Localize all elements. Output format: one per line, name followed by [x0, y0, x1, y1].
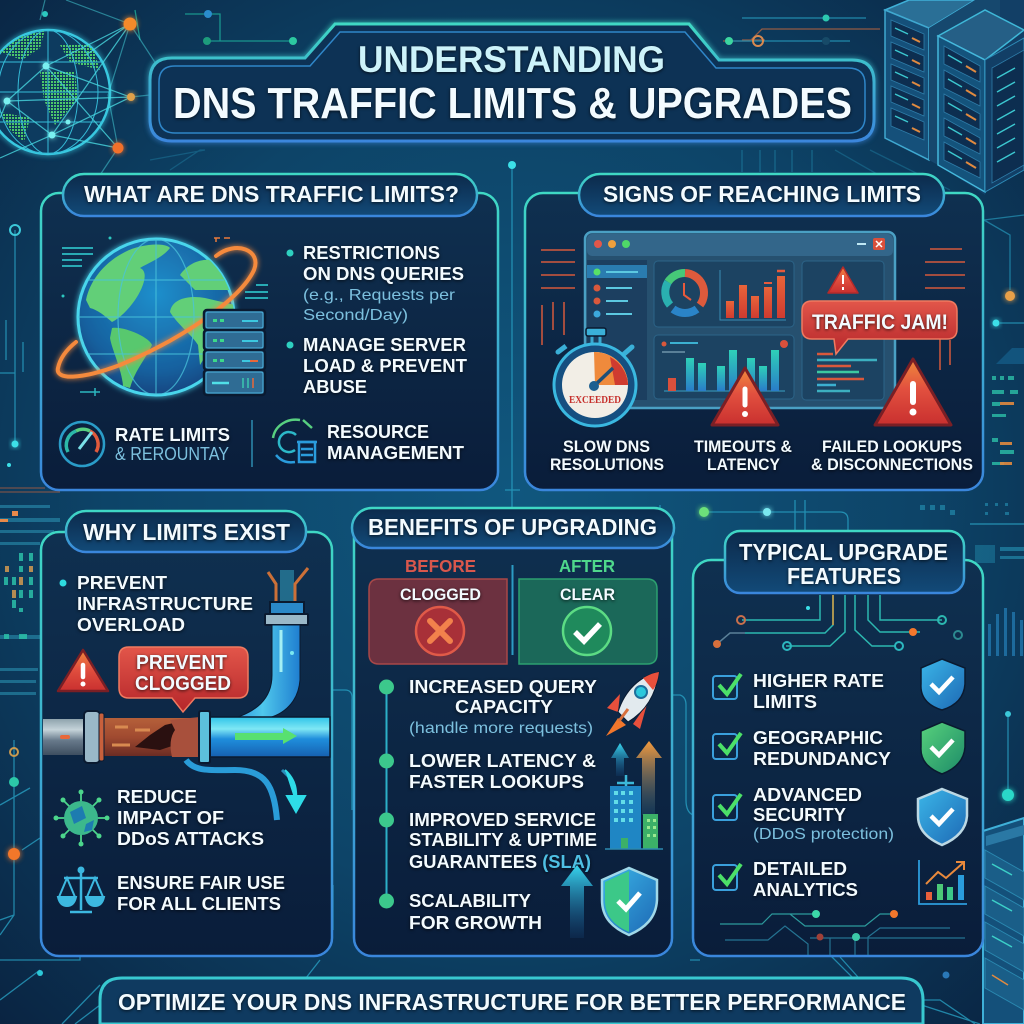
divider [512, 565, 514, 655]
icon: rocket [606, 672, 659, 736]
bullet list: LOAD & PREVENT [303, 355, 468, 376]
icon: security shield [918, 789, 967, 845]
feature list [713, 670, 894, 900]
teal bar chart [662, 340, 788, 391]
reduce ddos text: IMPACT OF [117, 807, 224, 828]
feature list: REDUNDANCY [753, 748, 892, 769]
feature list: (DDoS protection) [753, 826, 894, 843]
before column [369, 556, 507, 664]
bullet text: PREVENT [77, 572, 168, 593]
callout: prevent clogged [119, 647, 248, 712]
icon: resource management [273, 420, 317, 462]
log rows [817, 354, 877, 391]
heading pill [725, 531, 964, 593]
panel: typical upgrade features [693, 531, 983, 956]
after column: CLEAR [560, 586, 615, 604]
ensure fair use text: ENSURE FAIR USE [117, 872, 285, 893]
feature list: DETAILED [753, 858, 847, 879]
footer banner: OPTIMIZE YOUR DNS INFRASTRUCTURE FOR BETTER PERFORMANCE [118, 989, 906, 1015]
after column [519, 556, 657, 664]
timeline list: IMPROVED SERVICE [409, 809, 596, 830]
timeline list: CAPACITY [455, 696, 554, 717]
timeline list [379, 676, 598, 933]
bottom-right isometric server [983, 818, 1024, 1024]
heading pill: TYPICAL UPGRADE [739, 539, 948, 565]
panel: what are DNS traffic limits [41, 174, 498, 490]
feature list: GEOGRAPHIC [753, 727, 883, 748]
icon: virus [54, 790, 110, 846]
callout: traffic jam: TRAFFIC JAM! [812, 311, 948, 334]
ensure fair use text [117, 872, 285, 914]
resource management label [327, 421, 465, 463]
top-right isometric servers [885, 0, 1024, 195]
resource management label: RESOURCE [327, 421, 429, 442]
callout: traffic jam [802, 301, 957, 354]
top-left wireframe globe [0, 0, 160, 175]
pipe illustration [43, 568, 330, 820]
reduce ddos text: REDUCE [117, 786, 197, 807]
feature list: SECURITY [753, 804, 847, 825]
circuit decoration bottom [720, 910, 965, 955]
timeline list: FASTER LOOKUPS [409, 771, 584, 792]
heading pill [66, 511, 306, 552]
captions: & DISCONNECTIONS [811, 455, 973, 474]
feature list: HIGHER RATE [753, 670, 884, 691]
timeline list: FOR GROWTH [409, 912, 542, 933]
before column: BEFORE [405, 556, 476, 576]
icon: warning triangle centre [712, 368, 778, 425]
small warning [828, 267, 858, 293]
icon: earth with orbit and server [58, 236, 268, 396]
title line 1: UNDERSTANDING [358, 39, 665, 80]
heading pill [579, 174, 944, 216]
icon: growth arrows and city [605, 741, 663, 849]
footer banner [100, 978, 923, 1024]
icon: stopwatch exceeded [554, 328, 636, 426]
captions: FAILED LOOKUPS [822, 437, 962, 456]
bullet list: (e.g., Requests per [303, 287, 456, 304]
decorative log lines [541, 249, 965, 370]
captions [550, 437, 973, 474]
icon: warning triangle right [875, 359, 951, 425]
heading pill: BENEFITS OF UPGRADING [368, 514, 657, 540]
bullet list: ABUSE [303, 376, 367, 397]
dashboard window [585, 232, 895, 408]
title banner [150, 24, 874, 141]
bullet list: RESTRICTIONS [303, 242, 440, 263]
icon: gauge [60, 422, 104, 466]
bullet list: Second/Day) [303, 307, 408, 324]
bullet text: OVERLOAD [77, 614, 185, 635]
icon: blue shield [921, 659, 965, 710]
heading pill [352, 508, 674, 548]
callout: prevent clogged: PREVENT [136, 652, 227, 674]
icon: shield [602, 868, 657, 935]
icon: scales [58, 868, 104, 912]
feature list: ADVANCED [753, 784, 862, 805]
reduce ddos text [117, 786, 264, 849]
timeline list: SCALABILITY [409, 890, 532, 911]
timeline list: INCREASED QUERY [409, 676, 598, 697]
icon: stopwatch exceeded: EXCEEDED [569, 395, 621, 406]
bullet list [286, 242, 468, 397]
rate limits label: RATE LIMITS [115, 424, 230, 445]
panel: why limits exist [41, 511, 332, 956]
captions: TIMEOUTS & [694, 437, 792, 456]
bullet text [60, 572, 253, 635]
heading pill: SIGNS OF REACHING LIMITS [603, 181, 921, 207]
callout: prevent clogged: CLOGGED [135, 673, 231, 695]
rate limits label [115, 424, 230, 464]
before column: CLOGGED [400, 586, 481, 604]
panel: benefits of upgrading [352, 508, 674, 956]
bullet list: ON DNS QUERIES [303, 263, 464, 284]
feature list: ANALYTICS [753, 879, 858, 900]
resource management label: MANAGEMENT [327, 442, 465, 463]
reduce ddos text: DDoS ATTACKS [117, 828, 264, 849]
timeline list: GUARANTEES (SLA) [409, 851, 591, 872]
bullet text: INFRASTRUCTURE [77, 593, 253, 614]
circuit decoration top [713, 595, 962, 650]
icon: scalability arrow [561, 865, 593, 938]
captions: LATENCY [707, 455, 781, 474]
after column: AFTER [559, 556, 615, 576]
bullet list: MANAGE SERVER [303, 334, 466, 355]
icon: analytics chart [919, 860, 967, 904]
rate limits label: & REROUNTAY [115, 443, 229, 464]
timeline list: STABILITY & UPTIME [409, 829, 597, 850]
heading pill: WHAT ARE DNS TRAFFIC LIMITS? [84, 181, 459, 207]
heading pill [63, 174, 477, 216]
ensure fair use text: FOR ALL CLIENTS [117, 893, 281, 914]
donut clock [665, 273, 704, 313]
icon: green shield [921, 722, 965, 774]
background data grids [0, 348, 1024, 695]
captions: RESOLUTIONS [550, 455, 664, 474]
heading pill: WHY LIMITS EXIST [83, 519, 291, 545]
title line 2: DNS TRAFFIC LIMITS & UPGRADES [173, 79, 852, 128]
divider [251, 420, 253, 467]
captions: SLOW DNS [563, 437, 650, 456]
feature list: LIMITS [753, 691, 817, 712]
timeline list: LOWER LATENCY & [409, 750, 596, 771]
timeline list: (handle more requests) [409, 720, 593, 737]
red bar chart [720, 270, 786, 320]
panel: signs of reaching limits [525, 174, 983, 490]
heading pill: FEATURES [787, 563, 901, 589]
icon: warning triangle [58, 650, 108, 691]
